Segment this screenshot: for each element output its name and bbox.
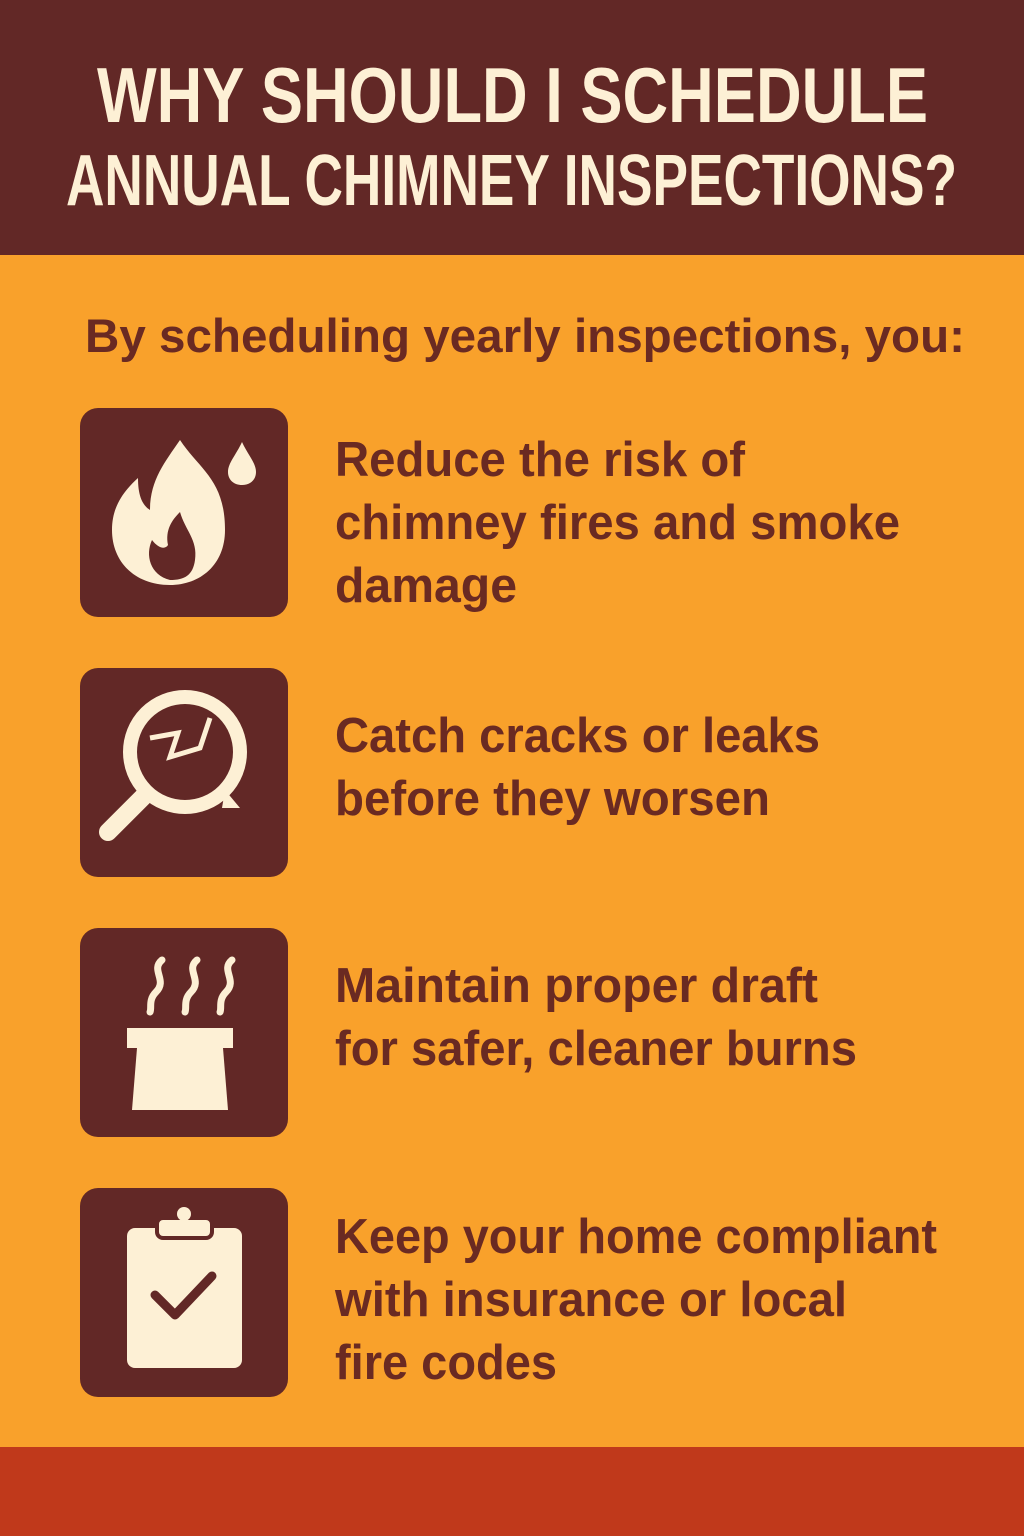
text: [334, 1210, 937, 1390]
icon: clipboard with checkmark: [80, 1188, 288, 1397]
text: Reduce the risk of: [335, 433, 746, 487]
item 3: proper draft: [80, 928, 857, 1137]
icon: chimney pot with steam: [80, 928, 288, 1137]
icon: magnifier with crack: [80, 668, 288, 877]
footer band: [0, 1447, 1024, 1536]
item 1: reduce fire risk: [80, 408, 900, 617]
text: fire codes: [335, 1336, 557, 1390]
icon: flame and drop: [80, 408, 288, 617]
title: [66, 51, 957, 221]
text: before they worsen: [335, 772, 770, 826]
item 2: catch cracks: [80, 668, 820, 877]
item 4: compliance: [80, 1188, 937, 1397]
text: Maintain proper draft: [335, 959, 818, 1013]
text: [335, 959, 857, 1076]
text: [335, 433, 900, 613]
header band: [0, 0, 1024, 255]
subtitle: By scheduling yearly inspections, you:: [85, 309, 965, 362]
text: [335, 709, 820, 826]
text: damage: [335, 559, 517, 613]
text: Catch cracks or leaks: [335, 709, 820, 763]
text: Keep your home compliant: [335, 1210, 937, 1264]
text: chimney fires and smoke: [335, 496, 900, 550]
text: with insurance or local: [334, 1273, 847, 1327]
text: for safer, cleaner burns: [335, 1022, 857, 1076]
